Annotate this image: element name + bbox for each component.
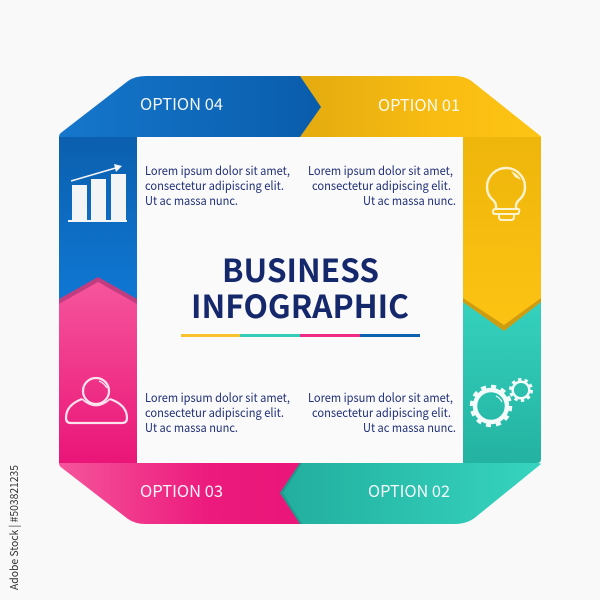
text block: top right: consectetur adipiscing elit. — [312, 177, 451, 194]
icon: light bulb — [487, 168, 525, 220]
text block: top left: Ut ac massa nunc. — [145, 192, 238, 209]
text block: top left: Lorem ipsum dolor sit amet, — [145, 162, 290, 179]
center panel — [137, 137, 463, 463]
band: option 04 top — [59, 76, 321, 137]
label: option 04: OPTION 04 — [140, 91, 223, 115]
icon: person — [66, 378, 127, 423]
text block: bottom right: consectetur adipiscing elit. — [312, 404, 451, 421]
panel: option 02 vertical — [463, 290, 541, 463]
text block: bottom right: Ut ac massa nunc. — [363, 419, 456, 436]
text block: bottom left: Lorem ipsum dolor sit amet, — [145, 389, 290, 406]
text block: bottom right: Lorem ipsum dolor sit amet, — [308, 389, 453, 406]
text block: top left — [145, 162, 290, 209]
label: option 03: OPTION 03 — [140, 478, 223, 502]
text block: bottom left: consectetur adipiscing elit. — [145, 404, 284, 421]
panel: option 03 vertical — [59, 277, 137, 463]
text block: top right: Lorem ipsum dolor sit amet, — [308, 162, 453, 179]
title underline — [181, 334, 420, 337]
title: INFOGRAPHIC — [191, 282, 409, 328]
text block: bottom left — [145, 389, 290, 436]
icon: gears — [472, 380, 532, 426]
title: BUSINESS — [222, 246, 379, 292]
text block: bottom right — [308, 389, 456, 436]
title — [191, 246, 409, 328]
panel: option 04 vertical — [59, 137, 137, 310]
icon: bar chart — [68, 164, 127, 222]
band: option 02 bottom — [280, 463, 541, 524]
text block: top right: Ut ac massa nunc. — [363, 192, 456, 209]
label: option 01: OPTION 01 — [378, 92, 460, 116]
label: option 02: OPTION 02 — [368, 478, 450, 502]
text block: top left: consectetur adipiscing elit. — [145, 177, 284, 194]
band: option 03 bottom — [59, 463, 310, 524]
text block: top right — [308, 162, 456, 209]
panel: option 01 vertical — [463, 137, 541, 331]
band: option 01 top — [295, 76, 541, 137]
side image credit: Adobe Stock | #503821235 — [6, 465, 22, 590]
text block: bottom left: Ut ac massa nunc. — [145, 419, 238, 436]
